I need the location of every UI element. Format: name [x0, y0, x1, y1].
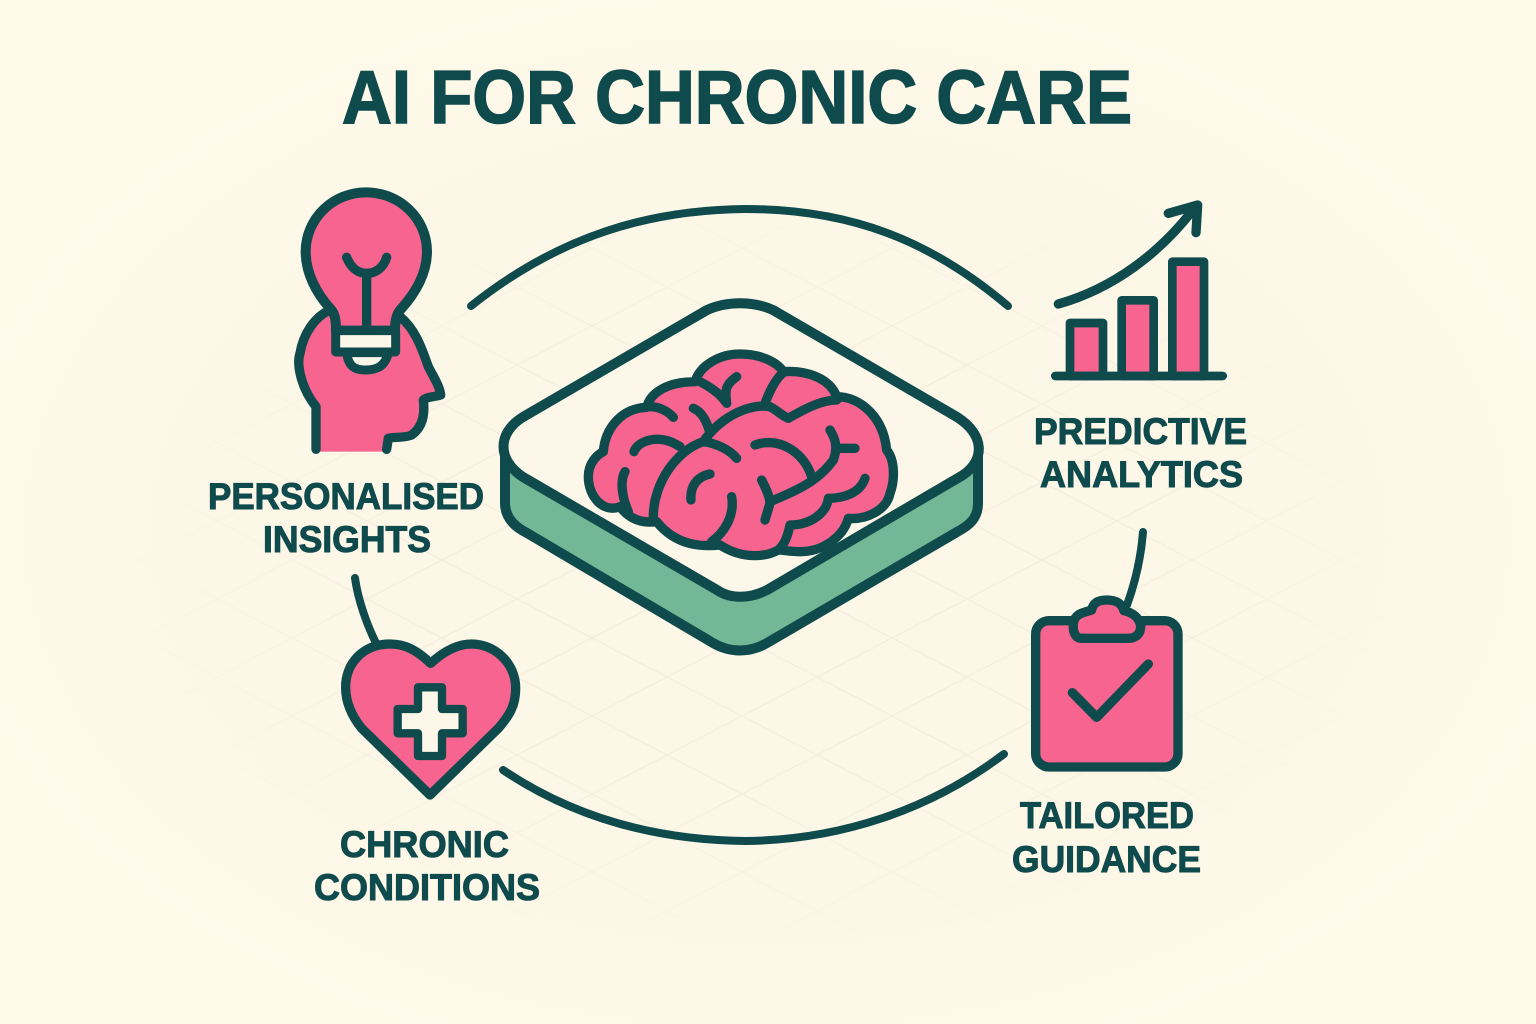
board	[1036, 621, 1178, 767]
label: predictive analytics	[1034, 411, 1247, 495]
bulb cap	[347, 353, 388, 370]
icon: rising bar chart	[1055, 205, 1223, 376]
label: predictive analytics: ANALYTICS	[1040, 454, 1243, 495]
label: chronic conditions: CONDITIONS	[314, 867, 540, 908]
arrow: connector insights to heart	[355, 578, 376, 643]
label: tailored guidance: TAILORED	[1020, 795, 1194, 836]
heart	[346, 644, 516, 795]
arrow: connector analytics to clipboard	[1127, 532, 1143, 605]
platform top	[504, 303, 979, 597]
clip	[1073, 600, 1141, 638]
label: personalised insights: PERSONALISED	[208, 476, 484, 517]
medical cross	[398, 687, 463, 756]
bulb filament	[347, 257, 387, 330]
label: personalised insights: INSIGHTS	[263, 519, 431, 560]
central isometric platform with brain	[504, 303, 979, 650]
label: chronic conditions: CHRONIC	[340, 824, 509, 865]
icon: heart with cross	[346, 644, 516, 795]
label: tailored guidance	[1012, 795, 1201, 880]
platform side	[505, 450, 978, 650]
icon: clipboard with check	[1036, 600, 1178, 767]
head outline	[299, 310, 441, 449]
bars	[1070, 262, 1204, 376]
growth arrow	[1058, 205, 1198, 304]
label: chronic conditions	[314, 824, 540, 908]
label: tailored guidance: GUIDANCE	[1012, 839, 1201, 880]
icon: head with lightbulb	[299, 192, 441, 452]
bulb glass	[306, 192, 427, 331]
title: AI FOR CHRONIC CARE	[342, 55, 1132, 139]
label: predictive analytics: PREDICTIVE	[1034, 411, 1247, 452]
icon: brain	[588, 354, 893, 556]
arrow: top arc from insights to analytics	[471, 209, 1008, 306]
check mark	[1072, 664, 1148, 717]
baseline	[1055, 363, 1223, 389]
head fill	[299, 310, 441, 452]
arrow: bottom arc from guidance to conditions	[503, 754, 1004, 841]
bulb base	[336, 331, 396, 352]
label: personalised insights	[208, 476, 484, 560]
